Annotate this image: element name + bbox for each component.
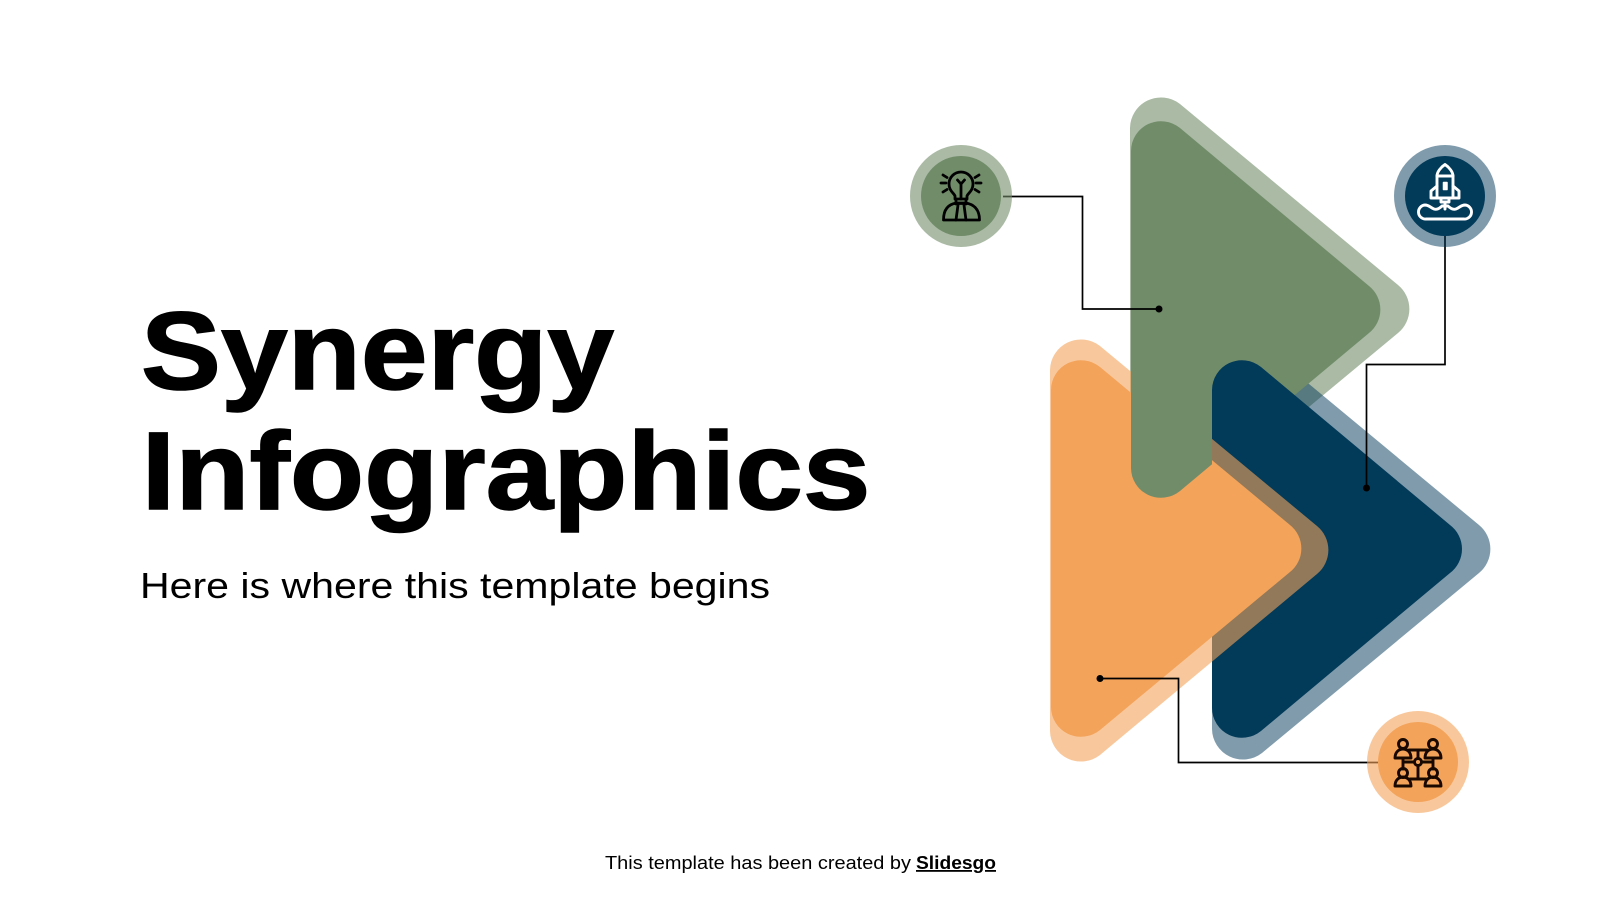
triangle: orange halo: [1050, 340, 1212, 762]
triangle: navy halo: [1212, 338, 1490, 760]
title: [141, 290, 870, 533]
connector: rocket to navy triangle: [1363, 236, 1445, 492]
title: Synergy: [141, 290, 614, 413]
subtitle: Here is where this template begins: [140, 565, 770, 606]
triangle: navy: [1212, 360, 1462, 738]
title: Infographics: [142, 410, 870, 533]
connector: bulb to green triangle: [1003, 196, 1162, 312]
triangle: orange: [1051, 360, 1301, 737]
triangle: orange tip over navy: [1212, 439, 1328, 662]
footer credit: This template has been created by: [605, 853, 911, 873]
footer credit: Slidesgo: [916, 853, 996, 873]
connector: network to orange triangle: [1096, 675, 1378, 762]
icon: lightbulb badge: [910, 145, 1012, 247]
triangle: green: [1131, 121, 1380, 498]
icon: rocket badge: [1394, 145, 1496, 247]
icon: network badge: [1367, 711, 1469, 813]
triangle: green halo: [1130, 97, 1409, 521]
